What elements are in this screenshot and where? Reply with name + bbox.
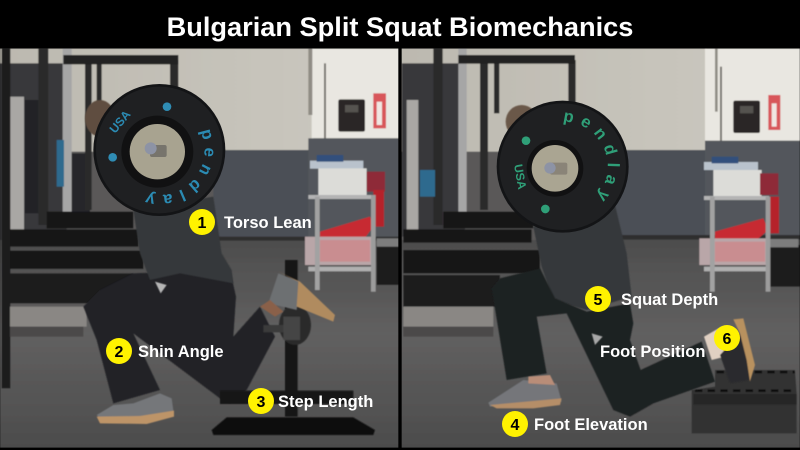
barbell plate left (93, 84, 226, 216)
front shoe (97, 393, 174, 424)
rear foot right (704, 318, 755, 383)
head (84, 100, 111, 136)
barbell plate right: pendlay (563, 112, 620, 202)
benches right (443, 212, 533, 228)
barbell plate left: pendlay (145, 130, 214, 204)
shelf (377, 245, 400, 285)
panel: left photo, lifter with bar on stand (0, 48, 398, 448)
title banner (0, 0, 800, 48)
head right (505, 104, 532, 130)
lifter shirt right (533, 205, 632, 310)
label 6: Foot Position: 6 (723, 331, 732, 348)
rear foot on stand (260, 272, 335, 322)
label 4: Foot Elevation (502, 411, 648, 437)
label 1: Torso Lean: 1 (198, 215, 207, 232)
label 5: Squat Depth: 5 (594, 292, 603, 309)
label 5: Squat Depth: Squat Depth (621, 291, 718, 309)
wall box right (733, 101, 760, 133)
label 5: Squat Depth (585, 286, 718, 312)
barbell plate left: USA (107, 107, 134, 136)
label 4: Foot Elevation: 4 (511, 417, 520, 434)
label 3: Step Length: Step Length (278, 393, 373, 411)
logo on pants (155, 282, 167, 293)
label 3: Step Length (248, 388, 373, 414)
foot block (692, 370, 797, 433)
barbell plate right: USA (511, 163, 529, 191)
barbell plate right (496, 100, 629, 233)
label 2: Shin Angle: Shin Angle (138, 343, 224, 361)
label 6: Foot Position: Foot Position (600, 343, 705, 361)
lifter pants (83, 270, 275, 403)
stand (212, 260, 375, 435)
title: Bulgarian Split Squat Biomechanics (167, 11, 633, 42)
exit sign right (768, 95, 780, 130)
label 2: Shin Angle: 2 (115, 344, 124, 361)
shelf right (770, 245, 800, 287)
label 2: Shin Angle (106, 338, 224, 364)
exit sign (373, 93, 386, 128)
label 1: Torso Lean: Torso Lean (224, 214, 312, 232)
front shoe right (488, 375, 562, 408)
gym background right (400, 48, 800, 448)
label 3: Step Length: 3 (257, 394, 266, 411)
label 1: Torso Lean (189, 209, 312, 235)
wall box (338, 99, 365, 132)
label 4: Foot Elevation: Foot Elevation (534, 416, 648, 434)
label 6: Foot Position (600, 325, 740, 361)
panel: right photo, lifter with foot on block (402, 48, 800, 448)
logo on pants right (592, 333, 603, 345)
lifter shirt (133, 197, 233, 283)
lifter pants right (492, 268, 715, 417)
gym background left (0, 48, 400, 448)
benches (47, 212, 133, 228)
